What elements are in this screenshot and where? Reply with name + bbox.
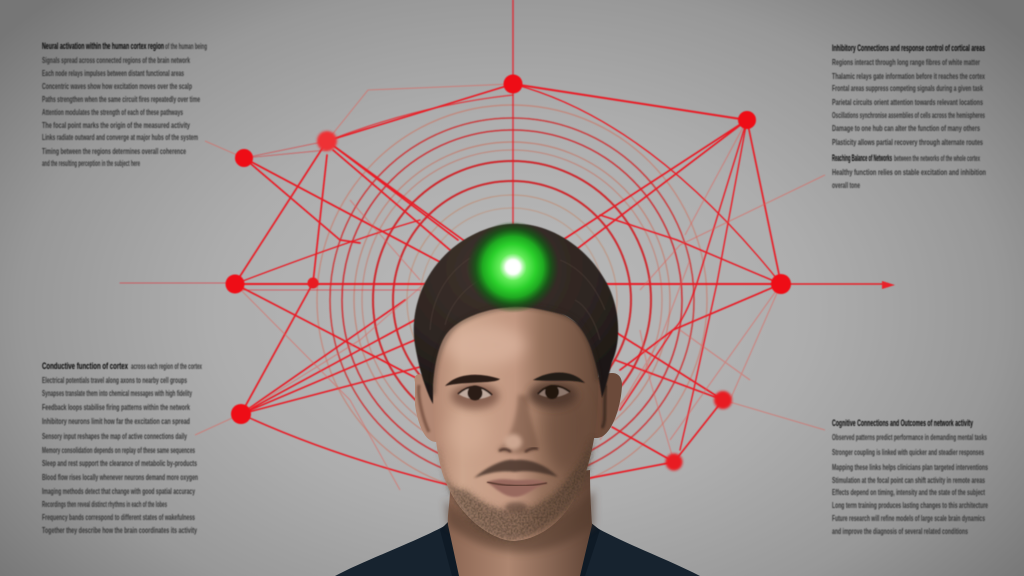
text block: lower left: Recordings then reveal distinct rhythms in each of the lobes <box>42 499 167 509</box>
node: left small <box>308 278 318 288</box>
node: right <box>771 274 791 294</box>
text block: upper left: The focal point marks the origin of the measured activity <box>42 120 190 130</box>
soul patch <box>505 502 527 512</box>
text block: upper left: Paths strengthen when the same circuit fires repeatedly over time <box>42 94 200 104</box>
network nodes <box>226 74 791 470</box>
eyebrow left <box>445 375 500 386</box>
ear left <box>415 374 442 442</box>
node: left <box>226 274 244 294</box>
cheek shadow <box>544 388 588 472</box>
node: lower left <box>231 404 251 424</box>
left cheek highlight <box>448 412 488 452</box>
text block: upper right: overall tone <box>832 180 860 190</box>
text block: upper right <box>832 43 986 190</box>
glowing green spot <box>467 221 559 313</box>
arrowhead <box>882 281 895 289</box>
left eye <box>458 386 492 400</box>
text block: lower left: Together they describe how the brain coordinates its activity <box>42 525 197 535</box>
text block: upper left <box>42 41 207 168</box>
text block: lower left: Electrical potentials travel along axons to nearby cell groups <box>42 375 187 385</box>
nose <box>497 395 538 453</box>
eye sockets <box>451 383 499 409</box>
text block: lower left: Memory consolidation depends on replay of these same sequences <box>42 445 195 455</box>
text block: upper left: Concentric waves show how excitation moves over the scalp <box>42 81 192 91</box>
node: bottom right <box>666 454 682 470</box>
text block: lower left: across each region of the cortex <box>131 361 202 371</box>
ear right <box>586 373 622 438</box>
hair <box>414 224 618 404</box>
text block: upper left: of the human being <box>165 41 207 51</box>
beard shade <box>438 435 592 541</box>
moustache <box>474 460 558 478</box>
text block: upper left: Attention modulates the strength of each of these pathways <box>42 107 183 117</box>
node: top left, blurred <box>317 131 337 151</box>
neck <box>448 470 592 576</box>
text block: lower left: Imaging methods detect that change with good spatial accuracy <box>42 486 195 496</box>
text block: lower right <box>832 418 988 536</box>
text block: upper left: Signals spread across connected regions of the brain network <box>42 55 190 65</box>
text block: lower left: Feedback loops stabilise firing patterns within the network <box>42 402 190 412</box>
right eye <box>538 385 570 399</box>
hair edge softening <box>433 307 598 395</box>
text block: lower left <box>42 361 202 535</box>
beard stubble <box>438 435 592 541</box>
portrait <box>335 224 700 576</box>
text block: upper left: Each node relays impulses between distant functional areas <box>42 68 184 78</box>
text block: upper left: and the resulting perception in the subject here <box>42 158 140 168</box>
network lines <box>120 0 885 490</box>
text block: lower left: Sensory input reshapes the map of active connections daily <box>42 431 187 441</box>
text block: upper right: Reaching Balance of Networks <box>832 153 892 164</box>
concentric rings <box>317 105 707 495</box>
text block: lower left: Inhibitory neurons limit how far the excitation can spread <box>42 416 190 426</box>
node: lower right <box>714 391 732 409</box>
text block: upper left: Timing between the regions determines overall coherence <box>42 146 186 156</box>
node: top <box>504 74 522 94</box>
shirt <box>335 522 700 576</box>
text block: lower left: Frequency bands correspond to different states of wakefulness <box>42 512 195 522</box>
text block: lower left: Synapses translate them into chemical messages with high fidelity <box>42 388 192 398</box>
text block: upper left: Links radiate outward and converge at major hubs of the system <box>42 132 198 142</box>
faint network lines <box>195 84 825 490</box>
node: top right <box>738 111 756 129</box>
text block: lower left: Conductive function of cortex <box>42 361 128 372</box>
eyebrow right <box>533 372 585 383</box>
node: left upper <box>235 149 253 167</box>
mouth <box>487 479 547 497</box>
forehead highlight <box>445 325 525 365</box>
hair streaks <box>430 258 605 340</box>
text block: lower left: Blood flow rises locally whenever neurons demand more oxygen <box>42 472 198 482</box>
text block: upper left: Neural activation within the human cortex region <box>42 41 164 52</box>
text block: lower left: Sleep and rest support the clearance of metabolic by-products <box>42 458 197 468</box>
face <box>432 303 598 541</box>
